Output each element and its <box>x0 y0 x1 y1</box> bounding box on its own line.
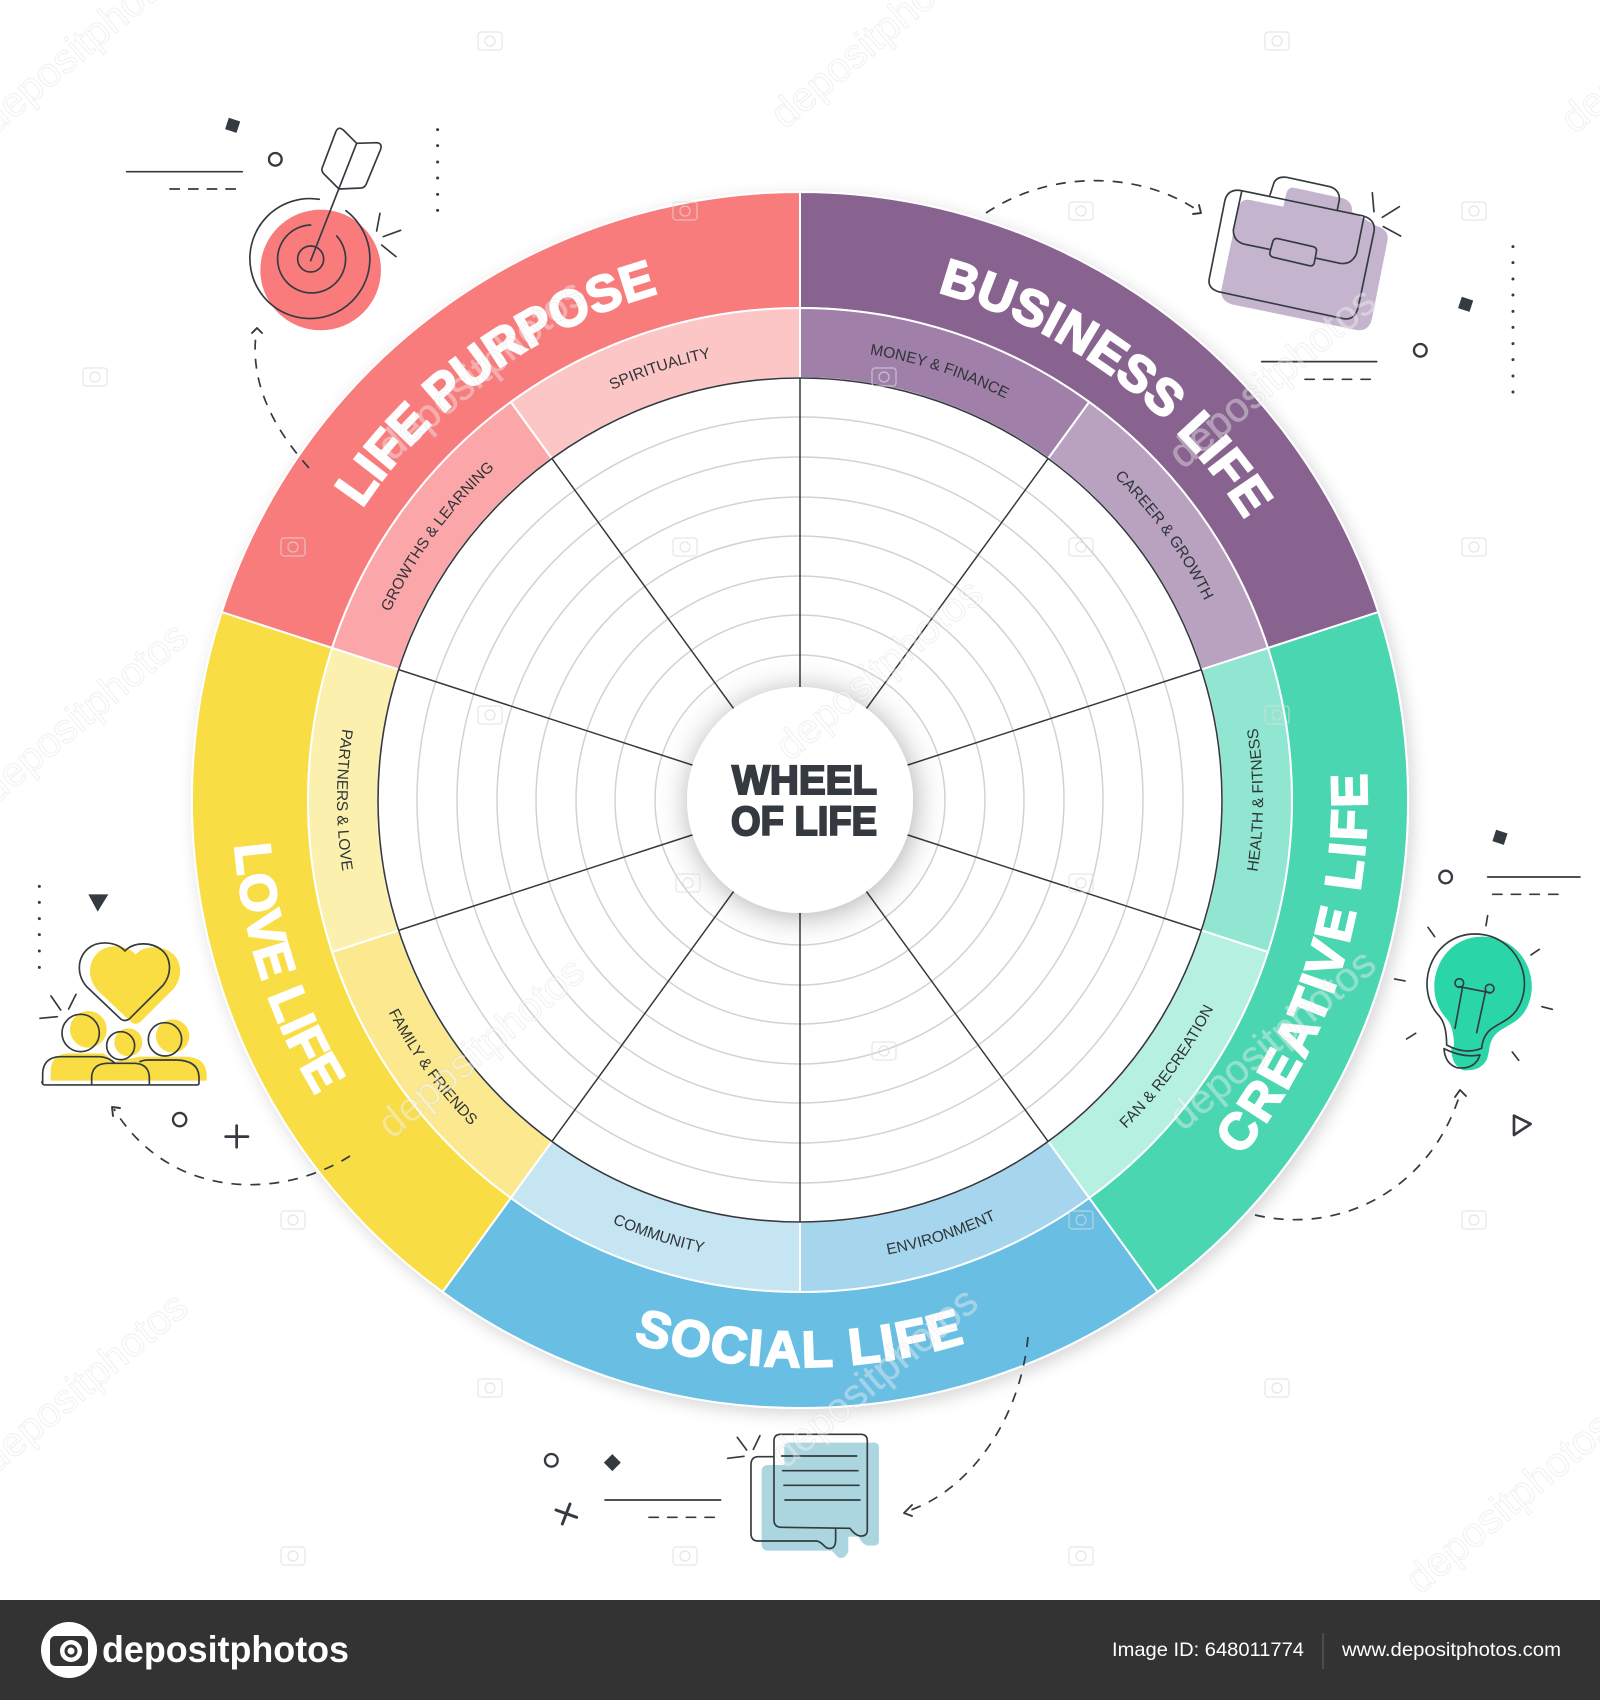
website: www.depositphotos.com <box>1341 1639 1561 1661</box>
arrow: love life to family <box>112 1107 350 1185</box>
label: fan and recreation: FAN & RECREATION <box>1119 1004 1213 1128</box>
sub-segment: community <box>511 1141 800 1292</box>
label: partners and love: PARTNERS & LOVE <box>336 730 353 871</box>
label: love life: LOVE LIFE <box>234 844 346 1096</box>
segment: creative life <box>1089 612 1408 1292</box>
title: wheel of life: OF LIFE <box>731 798 877 844</box>
watermark overlay: depositphotos <box>766 570 991 769</box>
icon: camera logo <box>41 1622 97 1678</box>
watermark overlay: depositphotos <box>368 270 593 469</box>
logo text: depositphotos <box>102 1629 349 1670</box>
icon: family and heart with decorations <box>38 885 248 1147</box>
segment: business life <box>800 192 1378 648</box>
label: business life: BUSINESS LIFE <box>940 258 1274 520</box>
center hub <box>687 687 913 913</box>
label: spirituality: SPIRITUALITY <box>610 348 708 389</box>
arrow: business life to briefcase <box>986 181 1201 214</box>
footer bar <box>0 1600 1600 1700</box>
label: creative life: CREATIVE LIFE <box>1219 774 1368 1150</box>
sub-segment: money and finance <box>800 308 1089 459</box>
label: environment: ENVIRONMENT <box>886 1210 993 1254</box>
label: career and growth: CAREER & GROWTH <box>1117 472 1214 600</box>
icon: chat bubbles with decorations <box>545 1434 879 1558</box>
icon: briefcase with decorations <box>1209 177 1514 393</box>
score chart rings and spokes <box>378 378 1222 1222</box>
sub-segment: growths and learning <box>332 402 552 670</box>
sub-segment: spirituality <box>511 308 800 459</box>
segment: love life <box>192 612 511 1292</box>
arrow: creative life to bulb <box>1255 1090 1466 1220</box>
watermark overlay: depositphotos <box>761 1278 986 1477</box>
watermark overlay: depositphotos <box>368 948 593 1147</box>
title: wheel of life <box>731 757 877 844</box>
label: social life: SOCIAL LIFE <box>636 1308 964 1368</box>
sub-segment: career and growth <box>1048 402 1268 670</box>
label: money and finance: MONEY & FINANCE <box>870 344 1010 398</box>
segment: social life <box>443 1198 1157 1408</box>
icon: target and dart with decorations <box>127 118 439 330</box>
sub-segment: fan and recreation <box>1048 930 1268 1198</box>
icon: light bulb with decorations <box>1395 830 1580 1135</box>
outer ring with five life areas <box>192 192 1408 1408</box>
arrow: life purpose to target <box>252 328 309 468</box>
title: wheel of life: WHEEL <box>732 757 877 803</box>
sub-segment: environment <box>800 1141 1089 1292</box>
watermark overlay: depositphotos <box>1159 940 1384 1139</box>
sub-segment: family and friends <box>332 930 552 1198</box>
label: growths and learning: GROWTHS & LEARNING <box>382 462 493 610</box>
label: health and fitness: HEALTH & FITNESS <box>1247 729 1264 871</box>
segment: life purpose <box>222 192 800 648</box>
wheel of life diagram <box>188 190 1420 1420</box>
sub-segment: health and fitness <box>1201 648 1292 952</box>
label: life purpose: LIFE PURPOSE <box>334 259 658 508</box>
image id: Image ID: 648011774 <box>1112 1639 1304 1661</box>
label: family and friends: FAMILY & FRIENDS <box>389 1008 477 1124</box>
sub-segment: partners and love <box>308 648 399 952</box>
watermark overlay: depositphotos <box>1159 278 1384 477</box>
inner ring with ten sub-areas <box>308 308 1292 1292</box>
arrow: social life to chat bubbles <box>904 1337 1028 1516</box>
label: community: COMMUNITY <box>614 1215 705 1252</box>
